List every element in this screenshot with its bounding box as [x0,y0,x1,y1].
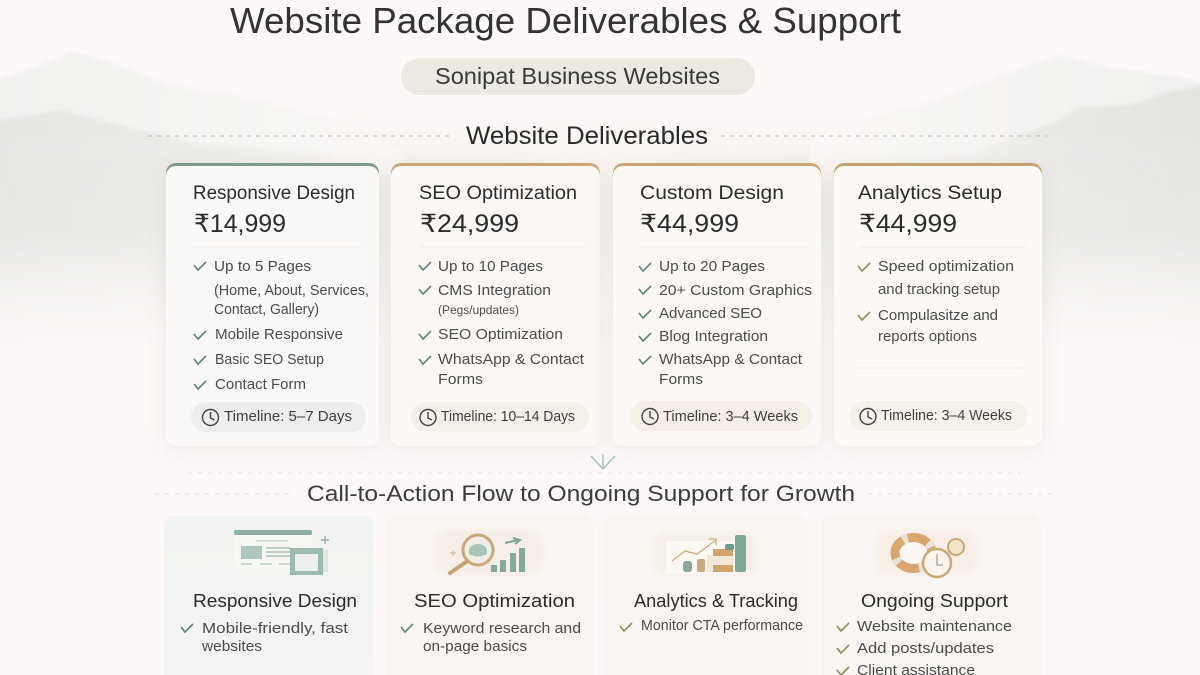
package name: SEO Optimization [419,183,577,204]
section heading: website deliverables: Website Deliverables [466,122,708,150]
card title: Analytics & Tracking [634,591,798,611]
feature list: Up to 20 Pages [659,258,765,275]
feature list: Advanced SEO [659,305,762,322]
feature list: (Home, About, Services, [214,282,369,299]
icon: magnifier and bars [434,529,543,575]
card title: SEO Optimization [414,591,575,611]
feature list: Forms [438,371,483,388]
card title: Responsive Design [193,591,357,611]
panel: ongoing support [821,516,1041,675]
support item: on-page basics [423,638,527,655]
feature list: Contact Form [215,376,306,393]
panel: seo optimization package [391,163,600,446]
feature list: WhatsApp & Contact [659,351,803,368]
subtitle pill [401,58,755,95]
price: ₹44,999 [640,210,739,238]
title: Website Package Deliverables & Support [230,0,901,41]
timeline pill [631,401,812,431]
support item [401,620,581,655]
timeline pill: Timeline: 3–4 Weeks [663,408,798,425]
price: ₹14,999 [194,210,286,238]
section heading: call-to-action flow: Call-to-Action Flow to Ongoing Support for Growth [307,481,855,506]
price: ₹44,999 [859,210,957,238]
support items: Add posts/updates [857,640,994,657]
timeline pill [411,402,589,432]
panel: seo optimization support [386,516,593,675]
subtitle pill: Sonipat Business Websites [435,63,720,89]
feature list [194,258,369,393]
feature list [419,258,585,388]
icon: growth chart [652,532,758,575]
background: misty mountains [0,54,1200,298]
support item: Keyword research and [423,620,581,637]
arrow: down to support flow [591,454,615,469]
panel: analytics setup package [834,163,1042,446]
timeline pill: Timeline: 3–4 Weeks [881,407,1012,424]
support item: websites [201,638,262,655]
feature list: Contact, Gallery) [214,301,319,318]
package name: Custom Design [640,183,784,204]
feature list: SEO Optimization [438,326,563,343]
feature list: and tracking setup [878,281,1000,298]
card title: Ongoing Support [861,591,1008,611]
feature list: Up to 5 Pages [214,258,311,275]
timeline pill [191,402,366,432]
panel: responsive design package [166,163,379,446]
feature list: reports options [878,328,977,345]
feature list: Mobile Responsive [215,326,343,343]
feature list: Compulasitze and [878,307,998,324]
timeline pill: Timeline: 10–14 Days [441,408,575,425]
feature list [639,258,812,388]
feature list: WhatsApp & Contact [438,351,585,368]
icon: lifebuoy and clock [875,530,978,577]
feature list: Up to 10 Pages [438,258,543,275]
feature list: Blog Integration [659,328,768,345]
package name: Analytics Setup [858,183,1002,204]
feature list [858,258,1014,345]
feature list: Forms [659,371,703,388]
price: ₹24,999 [420,210,519,238]
support item: Monitor CTA performance [641,617,803,634]
panel: custom design package [613,163,821,446]
timeline pill: Timeline: 5–7 Days [224,408,352,425]
feature list: CMS Integration [438,282,551,299]
support item: Mobile-friendly, fast [202,620,349,637]
feature list: Speed optimization [878,258,1014,275]
support item [181,620,349,655]
panel: analytics and tracking support [604,516,808,675]
timeline pill [849,401,1027,431]
support items: Website maintenance [857,618,1012,635]
panel: responsive design support [164,516,374,675]
feature list: 20+ Custom Graphics [659,282,812,299]
feature list: Basic SEO Setup [215,351,324,368]
support items [837,618,1012,675]
feature list: (Pegs/updates) [438,305,519,317]
icon: browser window [215,530,330,578]
package name: Responsive Design [193,183,355,204]
